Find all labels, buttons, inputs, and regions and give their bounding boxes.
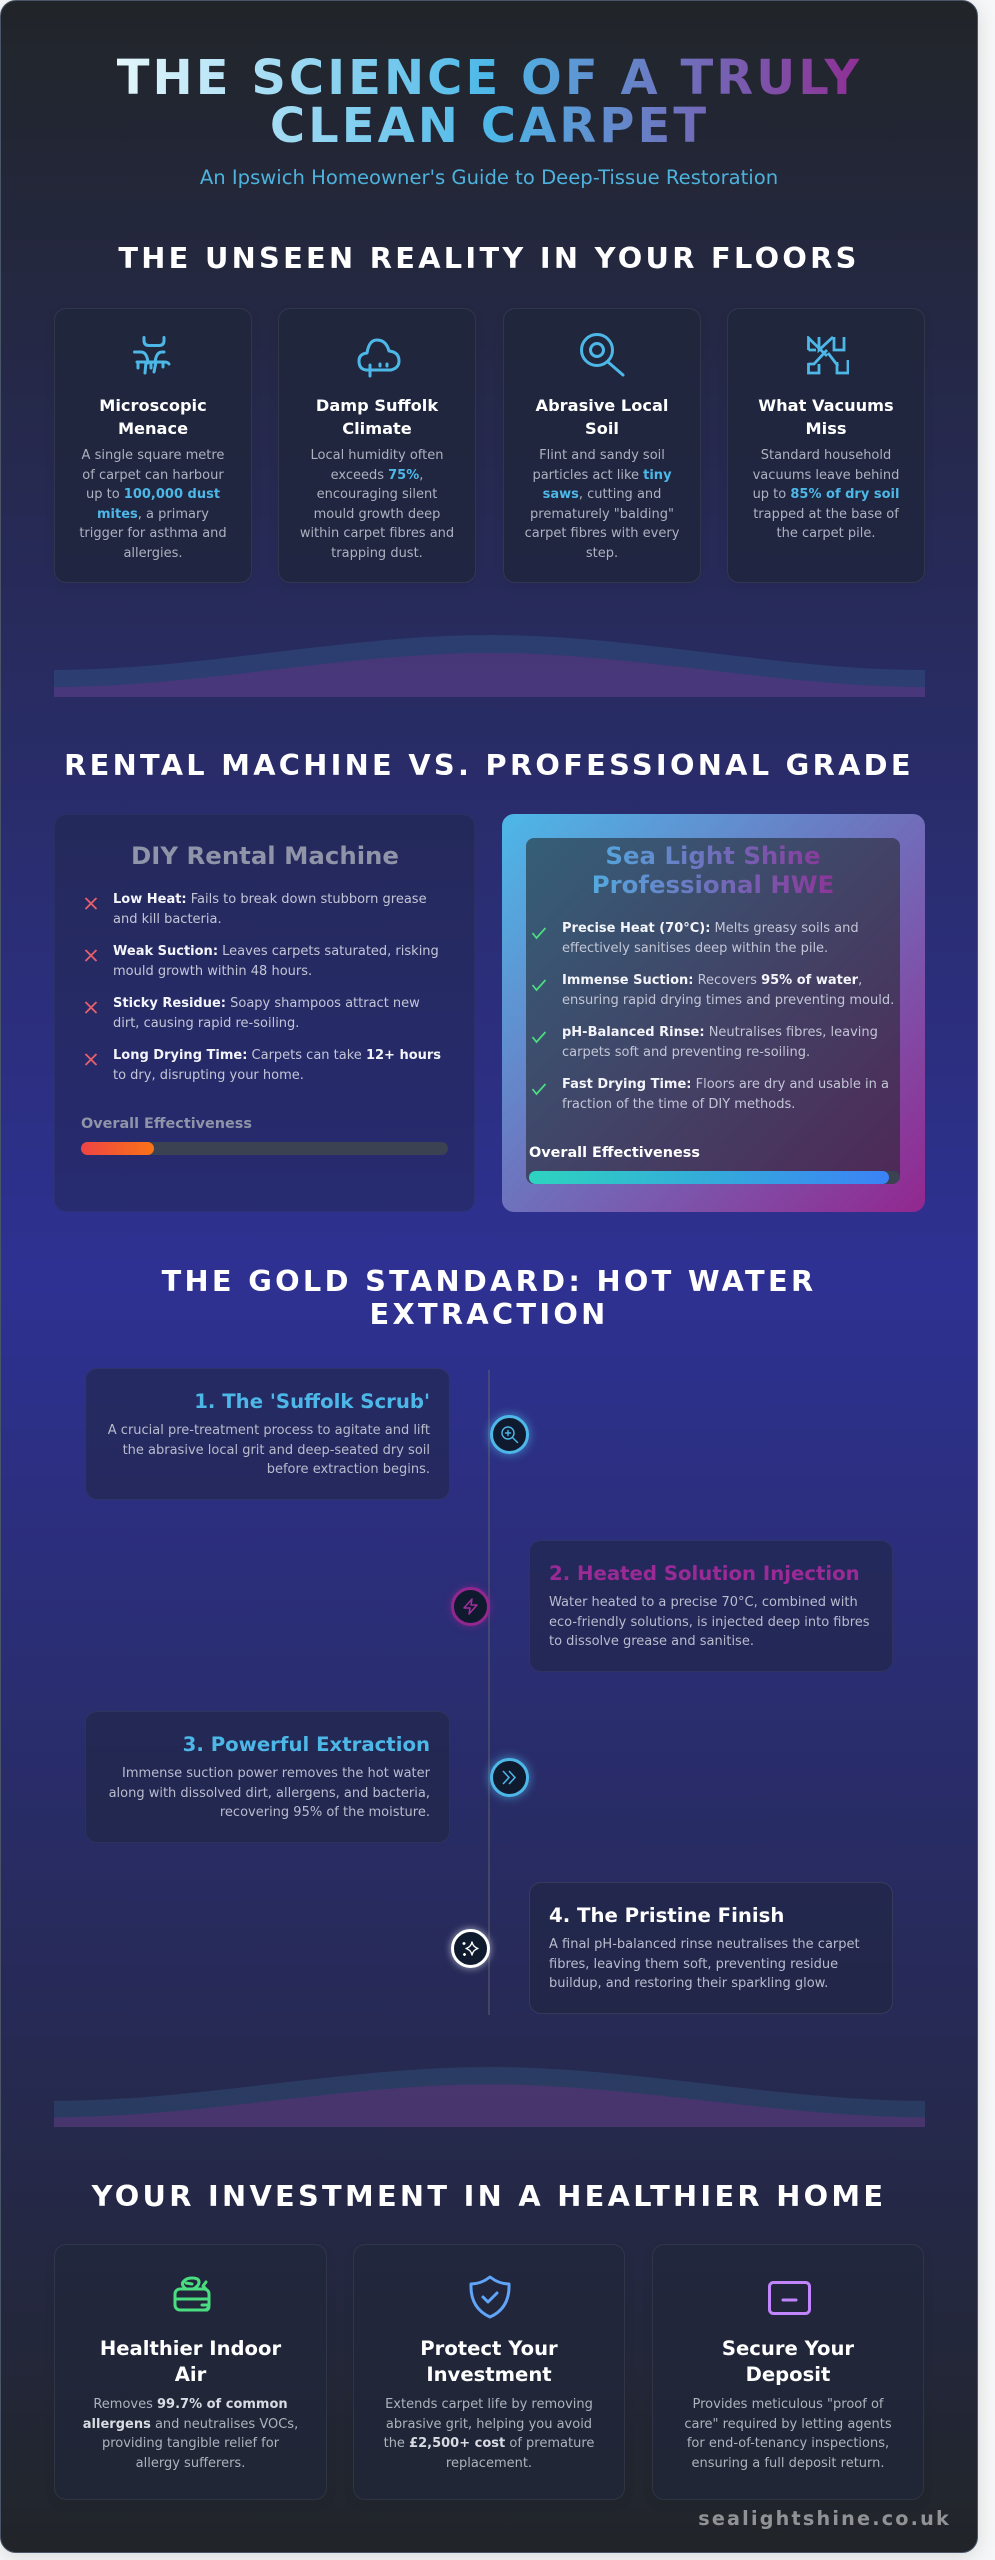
card text: mould growth deep [314, 507, 440, 522]
list item: sticky residue: dirt, causing rapid re-soiling. [113, 1016, 299, 1031]
step text: Water heated to a precise 70°C, combined with [549, 1595, 858, 1610]
heading: rental vs professional: RENTAL MACHINE VS. PROFESSIONAL GRADE [64, 748, 914, 782]
step text [108, 1423, 430, 1477]
inner panel [526, 838, 900, 1184]
footer website: sealightshine.co.uk [698, 2507, 951, 2530]
step 1 card [85, 1368, 450, 1500]
panel: DIY rental machine [54, 814, 475, 1212]
effectiveness bar [529, 1171, 900, 1184]
list item: immense suction: ensuring rapid drying times and preventing mould. [562, 993, 894, 1008]
list item: weak suction: Weak Suction: Leaves carpets saturated, risking [113, 944, 439, 959]
step title: 1. The 'Suffolk Scrub' [194, 1390, 430, 1413]
list item: precise heat [562, 921, 859, 956]
panel title: Sea Light Shine [605, 841, 821, 870]
step text [549, 1595, 870, 1649]
step 3 card [85, 1711, 450, 1843]
step text: the abrasive local grit and deep-seated dry soil [123, 1443, 430, 1458]
card text: for end-of-tenancy inspections, [687, 2436, 889, 2451]
card text: exceeds 75%, [331, 468, 423, 483]
card text: within carpet fibres and [300, 526, 454, 541]
panel: what vacuums miss [727, 308, 925, 583]
list item: immense suction: Immense Suction: Recovers 95% of water, [562, 973, 862, 988]
panel: secure your deposit [652, 2244, 924, 2500]
card text: Provides meticulous "proof of [692, 2397, 884, 2412]
card title: Climate [342, 419, 412, 438]
panel title [526, 841, 900, 899]
list item: low heat: Low Heat: Fails to break down stubborn grease [113, 892, 427, 907]
step title: 2. Heated Solution Injection [549, 1562, 860, 1585]
list item: pH-balanced rinse [562, 1025, 878, 1060]
list item: precise heat: Precise Heat (70°C): Melts greasy soils and [562, 921, 859, 936]
list item: weak suction: mould growth within 48 hours. [113, 964, 312, 979]
step 1 node: magnifier [490, 1415, 529, 1454]
card text: prematurely "balding" [530, 507, 674, 522]
card title [316, 396, 438, 438]
card text: Flint and sandy soil [539, 448, 665, 463]
card text: Standard household [761, 448, 891, 463]
card text [83, 2397, 298, 2471]
card text: up to 85% of dry soil [753, 487, 899, 502]
cross icons [84, 897, 98, 1066]
card title: Menace [118, 419, 188, 438]
list item: fast drying time [562, 1077, 889, 1112]
icon: magnifier [580, 333, 624, 377]
card text [684, 2397, 892, 2471]
step text: to dissolve grease and sanitise. [549, 1634, 754, 1649]
list item: long drying time: to dry, disrupting your home. [113, 1068, 304, 1083]
step text: A final pH-balanced rinse neutralises the carpet [549, 1937, 860, 1952]
card text: encouraging silent [317, 487, 437, 502]
card text: care" required by letting agents [684, 2417, 892, 2432]
check icons [532, 928, 546, 1096]
list item: weak suction [113, 944, 439, 979]
card text [79, 448, 227, 561]
card text: Local humidity often [310, 448, 444, 463]
card title: What Vacuums [758, 396, 894, 415]
step text [549, 1937, 860, 1991]
subtitle: An Ipswich Homeowner's Guide to Deep-Tissue Restoration [200, 166, 778, 189]
card title: Damp Suffolk [316, 396, 438, 415]
title: THE SCIENCE OF A TRULY [117, 50, 862, 106]
card text: the carpet pile. [776, 526, 876, 541]
title [54, 54, 925, 150]
card text [300, 448, 454, 561]
list item: long drying time: Long Drying Time: Carpets can take 12+ hours [113, 1048, 441, 1063]
card text: allergies. [123, 546, 183, 561]
panel: damp suffolk climate [278, 308, 476, 583]
card text: Extends carpet life by removing [385, 2397, 593, 2412]
step text: along with dissolved dirt, allergens, and bacteria, [109, 1786, 430, 1801]
card text [525, 448, 679, 561]
card title: Healthier Indoor [100, 2337, 281, 2360]
card text: trapped at the base of [753, 507, 899, 522]
card title: Miss [806, 419, 846, 438]
title: CLEAN CARPET [270, 98, 709, 154]
effectiveness label: Overall Effectiveness [529, 1145, 700, 1161]
timeline line [488, 1370, 490, 2015]
card title: Microscopic [99, 396, 207, 415]
icon: dust mite [133, 336, 170, 374]
card text [384, 2397, 594, 2471]
card text: carpet fibres with every [525, 526, 679, 541]
list item: pH-balanced rinse: carpets soft and preventing re-soiling. [562, 1045, 810, 1060]
card text: ensuring a full deposit return. [691, 2456, 885, 2471]
step text: A crucial pre-treatment process to agitate and lift [108, 1423, 430, 1438]
list item: fast drying time: Fast Drying Time: Floors are dry and usable in a [562, 1077, 889, 1092]
card title [99, 396, 207, 438]
step 2 node: bolt [451, 1587, 490, 1626]
step title: 4. The Pristine Finish [549, 1904, 784, 1927]
list item: fast drying time: fraction of the time of DIY methods. [562, 1097, 795, 1112]
card title [420, 2337, 558, 2386]
panel: healthier indoor air [54, 2244, 327, 2500]
step text: buildup, and restoring their sparkling glow. [549, 1976, 828, 1991]
card title: Deposit [746, 2363, 830, 2386]
heading: unseen reality: THE UNSEEN REALITY IN YOUR FLOORS [118, 241, 860, 275]
card text: mites, a primary [97, 507, 209, 522]
card title: Investment [426, 2363, 552, 2386]
card text: up to 100,000 dust [86, 487, 220, 502]
panel: protect your investment [353, 2244, 625, 2500]
icon: rain cloud [358, 338, 400, 378]
wave divider [54, 635, 925, 697]
card text: particles act like tiny [532, 468, 672, 483]
effectiveness label: Overall Effectiveness [81, 1116, 252, 1132]
list item: sticky residue [113, 996, 420, 1031]
card title: Secure Your [722, 2337, 854, 2360]
card text: trigger for asthma and [79, 526, 227, 541]
panel: microscopic menace [54, 308, 252, 583]
heading: investment: YOUR INVESTMENT IN A HEALTHIER HOME [92, 2179, 886, 2213]
card title [758, 396, 894, 438]
card title [536, 396, 668, 438]
card text: vacuums leave behind [753, 468, 899, 483]
list item: long drying time [113, 1048, 441, 1083]
panel: professional HWE [502, 814, 925, 1212]
card text: trapping dust. [331, 546, 423, 561]
step text: recovering 95% of the moisture. [220, 1805, 430, 1820]
icon: broken arrows [807, 336, 849, 374]
step text: before extraction begins. [267, 1462, 430, 1477]
list item: low heat: and kill bacteria. [113, 912, 222, 927]
heading: gold standard [162, 1264, 816, 1331]
list item: pH-balanced rinse: pH-Balanced Rinse: Neutralises fibres, leaving [562, 1025, 878, 1040]
effectiveness bar [81, 1142, 448, 1155]
step 4 node: sparkle [451, 1929, 490, 1968]
list item: low heat [113, 892, 427, 927]
heading: gold standard: EXTRACTION [369, 1297, 609, 1331]
card title: Abrasive Local [536, 396, 668, 415]
step 4 card [529, 1882, 893, 2014]
list item: immense suction [562, 973, 894, 1008]
list item: precise heat: effectively sanitises deep within the pile. [562, 941, 828, 956]
step text: fibres, leaving them soft, preventing residue [549, 1957, 838, 1972]
panel title: DIY Rental Machine [131, 841, 399, 870]
card text: providing tangible relief for [102, 2436, 279, 2451]
list item: sticky residue: Sticky Residue: Soapy shampoos attract new [113, 996, 420, 1011]
card title: Soil [585, 419, 619, 438]
card title [100, 2337, 282, 2386]
panel: abrasive local soil [503, 308, 701, 583]
card title: Protect Your [420, 2337, 558, 2360]
step text [109, 1766, 430, 1820]
heading: gold standard: THE GOLD STANDARD: HOT WATER [162, 1264, 816, 1298]
card text: replacement. [446, 2456, 532, 2471]
card text: step. [586, 546, 618, 561]
step 2 card [529, 1540, 893, 1672]
icon: deposit card [768, 2281, 811, 2315]
card text: Removes 99.7% of common [93, 2397, 288, 2412]
card text: abrasive grit, helping you avoid [386, 2417, 592, 2432]
icon: shield check [469, 2276, 511, 2318]
step text: Immense suction power removes the hot water [122, 1766, 430, 1781]
card title: Air [175, 2363, 206, 2386]
card text: of carpet can harbour [82, 468, 224, 483]
card title [722, 2337, 854, 2386]
card text: saws, cutting and [543, 487, 661, 502]
wave divider [54, 2067, 925, 2127]
card text: allergens and neutralises VOCs, [83, 2417, 298, 2432]
card text: A single square metre [82, 448, 224, 463]
step 3 node: chevrons [490, 1758, 529, 1797]
card text: the £2,500+ cost of premature [384, 2436, 594, 2451]
card text [753, 448, 900, 541]
panel title: Professional HWE [592, 870, 834, 899]
step text: eco-friendly solutions, is injected deep into fibres [549, 1615, 870, 1630]
step title: 3. Powerful Extraction [183, 1733, 430, 1756]
card text: allergy sufferers. [136, 2456, 245, 2471]
icon: air filter [174, 2276, 210, 2312]
